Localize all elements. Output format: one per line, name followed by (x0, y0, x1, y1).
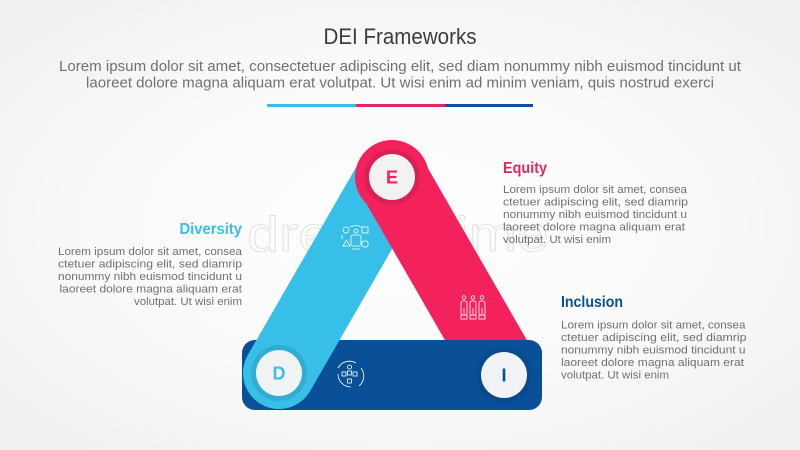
icon: diversity group (342, 226, 368, 249)
equity text block: ctetuer adipiscing elit, sed diamrip (503, 196, 688, 208)
diversity text block: ctetuer adipiscing elit, sed diamrip (58, 258, 242, 270)
diversity text block: nonummy nibh euismod tincidunt u (58, 271, 242, 283)
description (59, 58, 742, 92)
description: Lorem ipsum dolor sit amet, consectetuer adipiscing elit, sed diam nonummy nibh euismod tincidunt ut (59, 58, 742, 75)
node D: D (272, 364, 286, 384)
inclusion text block: nonummy nibh euismod tincidunt u (561, 344, 746, 356)
diversity band (279, 177, 392, 373)
equity text block: nonummy nibh euismod tincidunt u (503, 209, 687, 221)
inclusion bar (242, 340, 542, 410)
watermark: dreamstime (247, 208, 549, 262)
node I: I (501, 366, 507, 386)
equity text block: laoreet dolore magna aliquam erat (503, 222, 686, 234)
node E: E (386, 168, 398, 188)
equity band (355, 140, 506, 375)
inclusion text block: Inclusion (561, 294, 623, 311)
diversity text block: Diversity (180, 221, 242, 238)
inclusion text block: volutpat. Ut wisi enim (561, 370, 669, 382)
node D (251, 345, 307, 401)
node E (364, 149, 420, 205)
equity text block (503, 160, 688, 246)
equity text block: volutpat. Ut wisi enim (503, 234, 611, 246)
diversity text block: Lorem ipsum dolor sit amet, consea (58, 246, 243, 258)
equity text block: Equity (503, 160, 547, 177)
diversity text block: laoreet dolore magna aliquam erat (60, 284, 243, 296)
inclusion text block: laoreet dolore magna aliquam erat (561, 357, 745, 369)
equity text block: Lorem ipsum dolor sit amet, consea (503, 184, 688, 196)
diversity text block (58, 221, 243, 308)
icon: inclusion circle (338, 361, 364, 387)
diversity text block: volutpat. Ut wisi enim (134, 296, 242, 308)
inclusion text block: Lorem ipsum dolor sit amet, consea (561, 320, 746, 332)
title: DEI Frameworks (324, 24, 476, 49)
node I (476, 347, 532, 403)
inclusion text block: ctetuer adipiscing elit, sed diamrip (561, 332, 746, 344)
triangle diagram (242, 140, 542, 410)
tri-colour divider (267, 104, 533, 107)
inclusion text block (561, 294, 746, 382)
description: laoreet dolore magna aliquam erat volutpat. Ut wisi enim ad minim veniam, quis nostrud exerci (86, 74, 714, 92)
icon: equity people (461, 296, 485, 319)
